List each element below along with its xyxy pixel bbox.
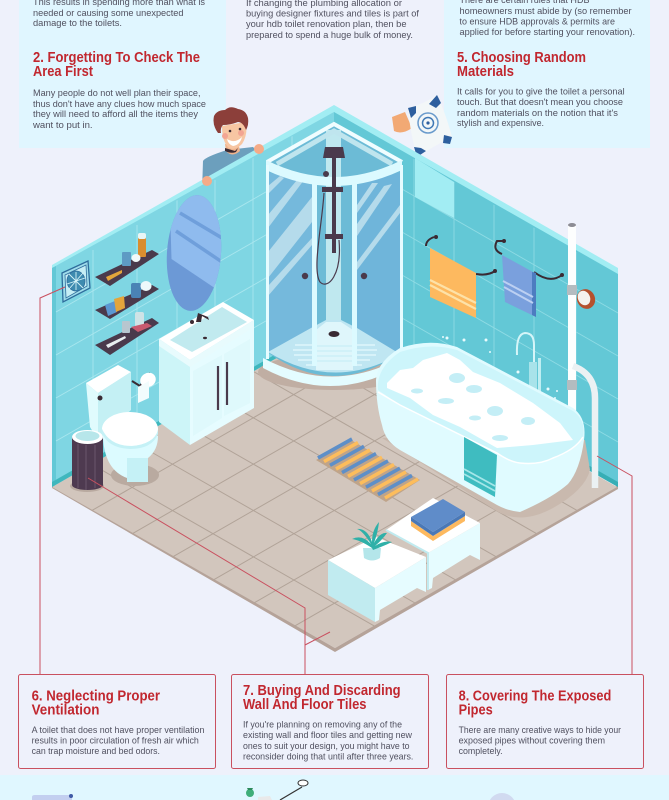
text: mistake 2 body: they will need to afford all the items they <box>33 108 198 119</box>
heading: mistake 5 <box>457 50 586 80</box>
heading: mistake 7 <box>243 683 401 713</box>
text: mistake 3 body: prepared to spend a huge bulk of money. <box>246 29 413 40</box>
wall patch <box>415 158 454 218</box>
text: mistake 3 body <box>246 0 419 40</box>
icon: toilet paper <box>132 370 158 403</box>
text: mistake 2 body: want to put in. <box>32 119 93 130</box>
panel: mistake 7 <box>232 674 428 768</box>
right wall <box>334 105 618 487</box>
text: mistake 6 body: results in poor circulation of fresh air which <box>32 734 199 746</box>
shelves with toiletries <box>95 233 159 355</box>
icon: hands gripping wall <box>202 144 264 186</box>
text: mistake 6 body: can trap moisture and bed odors. <box>32 745 160 756</box>
panel: mistake 6 <box>18 674 216 768</box>
icon: yellow towel <box>426 235 497 318</box>
text: mistake 7 body: reconsider doing that until after three years. <box>243 750 413 762</box>
icon: mop and money bag <box>246 780 308 800</box>
icon: bench tables with towels <box>328 498 480 622</box>
heading: mistake 5: Materials <box>457 64 514 80</box>
icon: corner shower <box>258 124 410 390</box>
text: mistake 4 body: applied for before starting your renovation). <box>460 26 635 37</box>
shower fittings <box>323 147 345 158</box>
icon: striped bath mat <box>316 439 420 502</box>
text: mistake 7 body: ones to suit your design, you might have to <box>243 740 410 751</box>
text: mistake 8 body: exposed pipes without covering them <box>459 734 605 746</box>
bottom band <box>0 775 669 800</box>
heading: mistake 6: 6. Neglecting Proper <box>32 688 160 704</box>
text: mistake 5 body: random materials on the notion that it's <box>457 107 618 118</box>
text: mistake 8 body: completely. <box>459 745 503 756</box>
icon: wall pipes and shower head <box>567 223 598 488</box>
panel: mistake 8 <box>446 674 644 768</box>
text: mistake 7 body: existing wall and floor tiles and getting new <box>243 729 412 740</box>
heading: mistake 6 <box>32 688 160 718</box>
text: mistake 6 body: A toilet that does not have proper ventilation <box>32 724 204 735</box>
text: mistake 5 body: It calls for you to give the toilet a personal <box>457 86 625 96</box>
icon: blue towel <box>495 239 564 317</box>
icon: scroll <box>32 794 73 800</box>
icon: sink vanity <box>159 302 254 445</box>
icon: tub tap and bubbles <box>442 333 558 399</box>
icon: potted plant <box>352 522 392 560</box>
text: mistake 1 body <box>33 0 205 28</box>
heading: mistake 8: 8. Covering The Exposed <box>459 688 611 704</box>
heading: mistake 8: Pipes <box>459 702 493 718</box>
icon: oval mirror <box>166 195 222 311</box>
heading: mistake 8 <box>459 688 611 718</box>
text: mistake 4 body <box>460 0 635 37</box>
icon: trash bin <box>70 430 104 492</box>
text: mistake 2 body: thus don't have any clues how much space <box>33 98 206 109</box>
text: mistake 5 body <box>457 86 625 128</box>
heading: mistake 7: Wall And Floor Tiles <box>243 697 366 713</box>
text: mistake 8 body <box>459 724 621 756</box>
panel: mistake 1 and 2 <box>19 0 226 148</box>
icon: person peeking over wall <box>202 107 258 192</box>
text: mistake 3 body: buying designer fixtures and tiles is part of <box>246 8 419 18</box>
icon: ventilation fan <box>62 261 90 302</box>
heading: mistake 6: Ventilation <box>32 702 99 718</box>
floor <box>52 358 618 652</box>
text: mistake 8 body: There are many creative ways to hide your <box>459 724 621 735</box>
frame <box>267 124 402 162</box>
text: mistake 2 body <box>32 87 206 130</box>
left wall <box>52 105 334 487</box>
text: mistake 4 body: homeowners must abide by (so remember <box>460 5 632 16</box>
heading: mistake 5: 5. Choosing Random <box>457 50 586 66</box>
icon: circle <box>488 793 516 800</box>
text: mistake 5 body: touch. But that doesn't mean you choose <box>457 96 623 107</box>
text: mistake 2 body: Many people do not well plan their space, <box>33 87 200 98</box>
text: mistake 1 body: needed or causing some unexpected <box>33 7 184 18</box>
text: mistake 7 body <box>243 718 413 762</box>
text: mistake 1 body: damage to the toilets. <box>33 17 122 28</box>
heading: mistake 2: Area First <box>33 64 93 80</box>
leader lines <box>40 287 632 674</box>
shower tray <box>268 320 400 373</box>
text: mistake 7 body: If you're planning on removing any of the <box>243 718 402 730</box>
heading: mistake 2: 2. Forgetting To Check The <box>33 50 200 66</box>
text: mistake 4 body: to ensure HDB approvals & permits are <box>460 16 615 26</box>
glass streaks <box>268 176 400 296</box>
panel: mistake 4 and 5 <box>444 0 650 148</box>
icon: toilet <box>86 365 159 486</box>
icon: bathtub with foam <box>376 343 590 518</box>
icon: patterned tile held by hand <box>392 95 452 157</box>
towel on tub <box>464 437 497 497</box>
heading: mistake 7: 7. Buying And Discarding <box>243 683 401 699</box>
text: mistake 3 body: your hdb toilet renovation plan, then be <box>246 18 406 29</box>
text: mistake 6 body <box>32 724 204 756</box>
heading: mistake 2 <box>33 50 200 80</box>
text: mistake 5 body: stylish and expensive. <box>457 117 544 128</box>
